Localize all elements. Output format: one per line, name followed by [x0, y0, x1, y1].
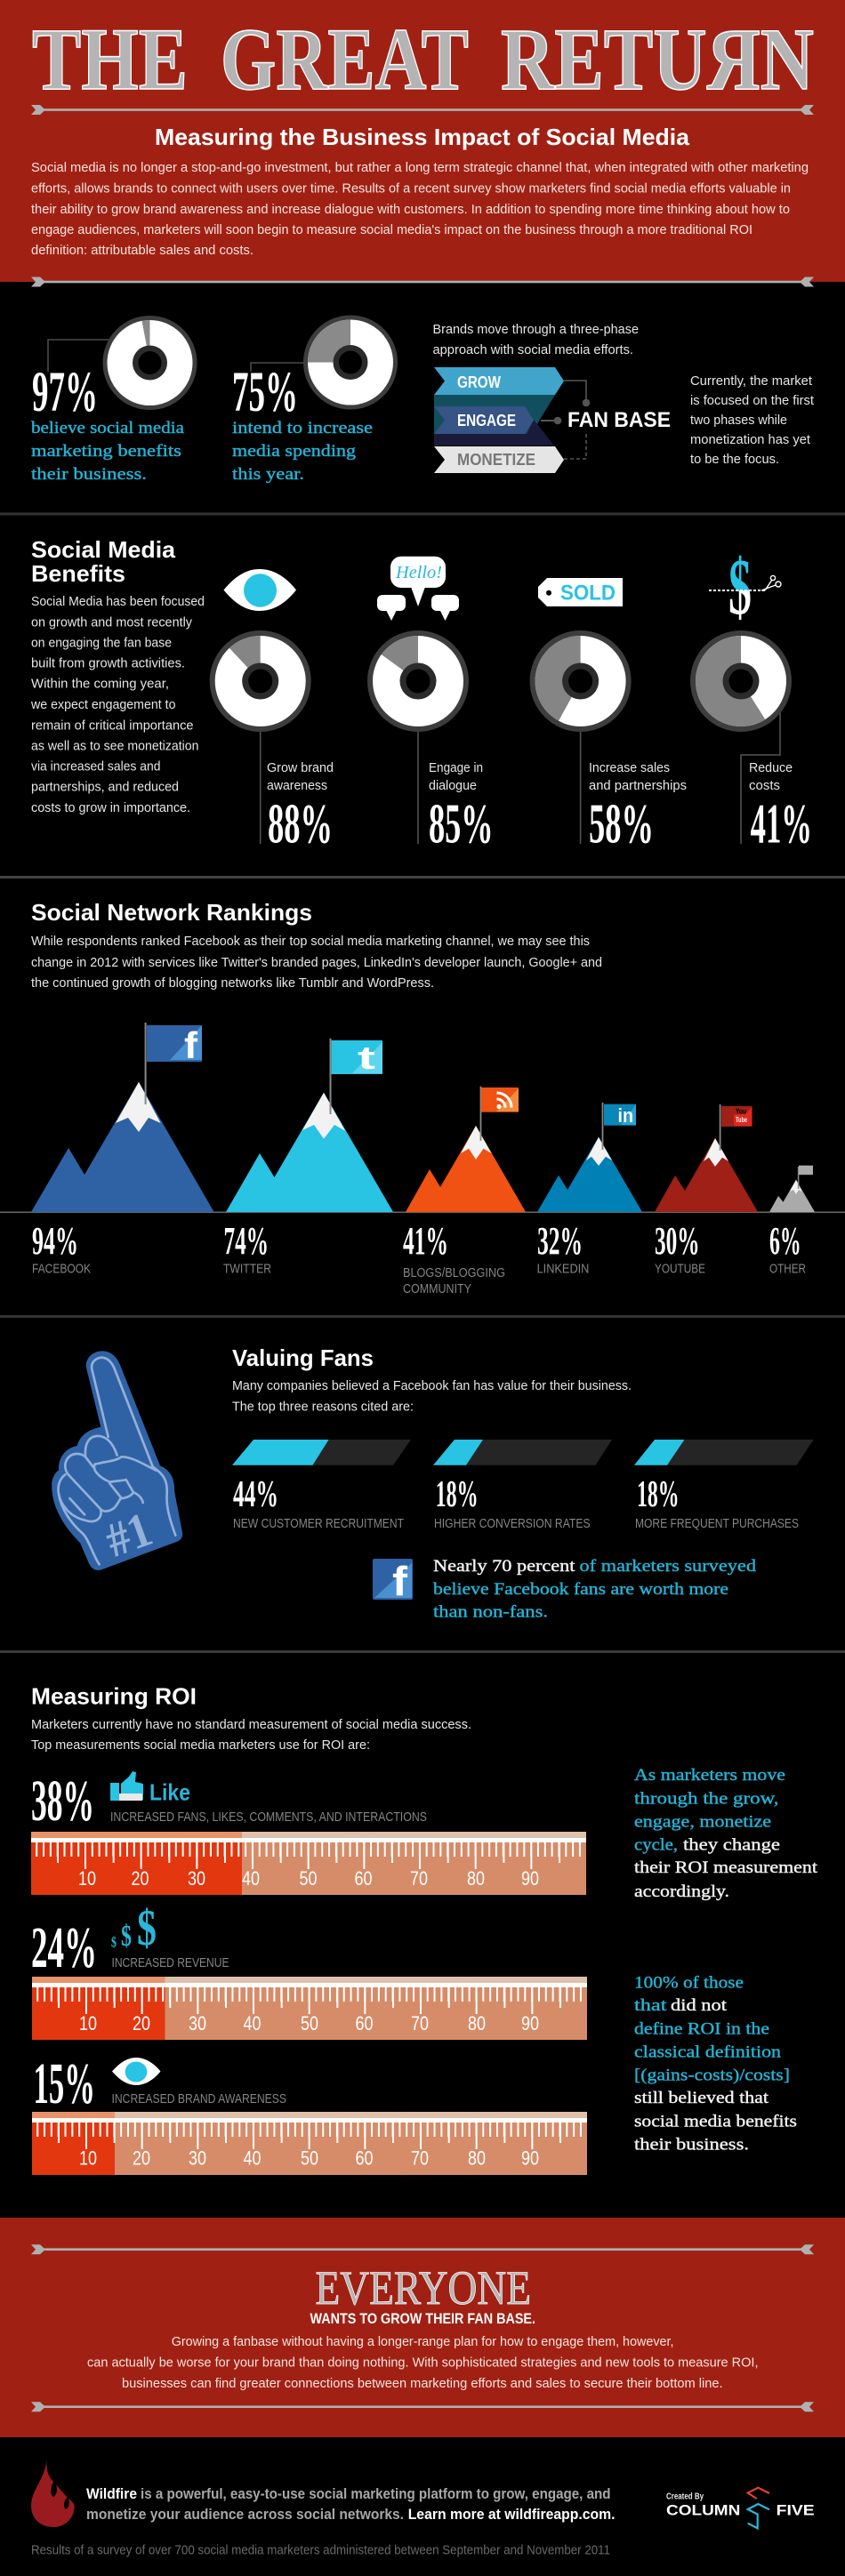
icon: dollar with scissors — [709, 543, 781, 631]
callout: classical definition: still believed that — [634, 2089, 769, 2107]
sub-headline: WANTS TO GROW THEIR FAN BASE. — [310, 2310, 535, 2327]
flag: youtube: Tube — [736, 1116, 747, 1124]
chevron: grow: GROW — [457, 373, 501, 391]
ruler 24%: 70 — [411, 2012, 429, 2034]
stat 97% caption — [31, 419, 185, 484]
reason: higher conversion rates: HIGHER CONVERSION RATES — [434, 1516, 591, 1531]
panel: conclusion — [0, 2218, 845, 2437]
panel: measuring roi — [31, 1682, 818, 2175]
callout: classical definition: classical definition — [634, 2043, 782, 2062]
callout: classical definition: [(gains-costs)/costs] — [634, 2066, 790, 2085]
ruler 38%: 10 — [78, 1867, 96, 1890]
ruler 24%: 90 — [521, 2012, 539, 2034]
benefit: grow brand awareness: 88% — [268, 792, 333, 855]
stat 97% caption: marketing benefits — [31, 442, 181, 461]
stat 38%: Like — [149, 1778, 190, 1805]
reason: higher conversion rates: 18% — [436, 1474, 479, 1515]
fan base label: FAN BASE — [567, 408, 671, 432]
arrow divider bottom — [31, 2402, 814, 2411]
intro text: engage audiences, marketers will soon begin to measure social media's impact on the business through a more traditional ROI — [31, 222, 752, 237]
heading: Social Media — [31, 536, 176, 563]
ruler 38%: 60 — [354, 1867, 372, 1890]
body text: Top measurements social media marketers use for ROI are: — [31, 1737, 370, 1753]
body text: Marketers currently have no standard measurement of social media success. — [31, 1717, 471, 1732]
benefit: engage in dialogue: 85% — [429, 792, 494, 855]
flag: twitter — [332, 1039, 382, 1076]
icon: foam finger: #1 — [99, 1502, 158, 1568]
panel: social network rankings — [0, 899, 845, 1296]
intro text: definition: attributable sales and costs. — [31, 243, 254, 258]
callout: measurement cycle — [634, 1766, 818, 1901]
flag: facebook: f — [184, 1024, 198, 1066]
callout: measurement cycle: cycle, — [634, 1836, 678, 1855]
callout: facebook fans value: believe Facebook fans are worth more — [433, 1580, 728, 1599]
body text: While respondents ranked Facebook as their top social media marketing channel, we may see this — [31, 934, 590, 949]
mountain: youtube — [655, 1104, 758, 1212]
body text: Social Media has been focused — [31, 594, 205, 609]
rank: youtube: 30% — [655, 1219, 700, 1263]
rank: other — [769, 1219, 806, 1277]
body text: Within the coming year, — [31, 677, 169, 692]
heading — [31, 536, 176, 587]
ruler 15%: 30 — [189, 2147, 206, 2170]
body text: remain of critical importance — [31, 718, 194, 733]
ruler 24%: 80 — [468, 2012, 486, 2034]
conclusion text — [87, 2334, 758, 2391]
stat 24%: INCREASED REVENUE — [112, 1955, 229, 1970]
intro text: Social media is no longer a stop-and-go investment, but rather a long term strategic channel that, when integrated with other marketing — [31, 160, 809, 175]
donut 41% — [690, 630, 792, 844]
body text — [31, 1717, 471, 1753]
donut 85% — [367, 630, 469, 844]
icon: sold tag: SOLD — [560, 582, 616, 605]
body text: built from growth activities. — [31, 656, 185, 671]
benefit: increase sales and partnerships — [589, 760, 687, 855]
conclusion text: Growing a fanbase without having a longer-range plan for how to engage them, however, — [172, 2334, 673, 2349]
chevron: monetize — [434, 446, 564, 473]
benefit: grow brand awareness: awareness — [267, 778, 327, 793]
intro text: efforts, allows brands to connect with users over time. Results of a recent survey show marketers find social media efforts valuable in — [31, 181, 791, 196]
heading: Measuring ROI — [31, 1682, 197, 1709]
body text: we expect engagement to — [30, 697, 176, 712]
benefit: reduce costs: costs — [749, 778, 780, 793]
reason: new customer recruitment: NEW CUSTOMER RECRUITMENT — [233, 1516, 404, 1531]
body text — [232, 1378, 632, 1415]
chevron: engage — [434, 406, 534, 434]
rank: youtube: YOUTUBE — [655, 1262, 705, 1277]
reason: more frequent purchases — [634, 1440, 814, 1531]
headline: EVERYONE — [315, 2261, 531, 2315]
icon: speech bubbles — [377, 557, 459, 621]
market focus note: Currently, the market — [690, 373, 813, 389]
body text: partnerships, and reduced — [31, 780, 179, 795]
mountain: facebook — [31, 1023, 214, 1212]
reason: new customer recruitment: 44% — [233, 1474, 278, 1515]
chevron: engage: ENGAGE — [457, 412, 516, 429]
three-phase intro: Brands move through a three-phase — [432, 322, 639, 337]
flag: rss — [481, 1087, 519, 1112]
rank: linkedin: 32% — [537, 1219, 583, 1263]
three-phase intro: approach with social media efforts. — [432, 342, 633, 357]
conclusion text: businesses can find greater connections between marketing efforts and sales to secure their bottom line. — [122, 2376, 723, 2391]
title — [32, 10, 814, 108]
mountain: other — [769, 1166, 815, 1212]
title: GREAT — [221, 10, 469, 108]
icon: dollars: $ — [121, 1920, 132, 1953]
panel: social media benefits — [30, 536, 812, 855]
icon: dollar with scissors: $ — [728, 543, 752, 631]
flag: youtube — [721, 1106, 752, 1127]
market focus note: to be the focus. — [690, 452, 779, 467]
mountain: blogs — [406, 1087, 526, 1212]
callout: classical definition — [634, 1974, 797, 2154]
donut 75% — [251, 315, 398, 409]
wildfire description: is a powerful, easy-to-use social marketing platform to grow, engage, and — [141, 2485, 610, 2502]
icon: sold tag — [538, 578, 623, 606]
arrow divider top — [31, 2244, 814, 2254]
stat 75% caption: media spending — [232, 442, 357, 461]
callout: measurement cycle: their ROI measurement — [634, 1858, 818, 1877]
callout: classical definition: that — [634, 1996, 667, 2015]
ruler 15%: 60 — [356, 2147, 374, 2170]
subtitle: Measuring the Business Impact of Social Media — [155, 124, 690, 150]
benefit: increase sales and partnerships: 58% — [589, 792, 654, 855]
flag: youtube: You — [736, 1108, 746, 1115]
benefit: engage in dialogue: dialogue — [429, 778, 477, 793]
panel: key stats — [31, 315, 815, 484]
rank: youtube — [655, 1219, 705, 1277]
ruler 15%: 50 — [301, 2147, 318, 2170]
callout: facebook fans value: Nearly 70 percent — [433, 1557, 575, 1576]
rank: blogs — [403, 1219, 505, 1296]
wildfire description: Learn more at wildfireapp.com. — [408, 2506, 616, 2523]
ruler 24%: 30 — [189, 2012, 206, 2034]
ruler 15%: 40 — [244, 2147, 262, 2170]
body text — [31, 934, 602, 991]
donut 97% — [48, 316, 197, 410]
chevron: grow — [434, 367, 564, 395]
rank: other: 6% — [769, 1219, 801, 1263]
stat 75% caption: this year. — [232, 465, 304, 484]
callout: facebook fans value: than non-fans. — [433, 1603, 548, 1622]
mountain: twitter — [226, 1039, 393, 1212]
ruler 38%: 80 — [467, 1867, 485, 1890]
callout: measurement cycle: engage, monetize — [634, 1812, 771, 1832]
intro text: their ability to grow brand awareness and increase dialogue with customers. In addition to spending more time thinking about how to — [31, 202, 790, 217]
chevron: monetize: MONETIZE — [457, 451, 535, 469]
stat 75% caption — [232, 419, 373, 484]
ruler 38%: 30 — [188, 1867, 205, 1890]
stat 15% — [34, 2051, 286, 2116]
donut 58% — [530, 630, 632, 844]
ruler 38% — [31, 1832, 586, 1895]
icon: dollars: $ — [137, 1900, 157, 1956]
stat 38%: INCREASED FANS, LIKES, COMMENTS, AND INTERACTIONS — [110, 1810, 427, 1825]
mountain: linkedin — [537, 1103, 642, 1212]
stat 97% caption: their business. — [31, 465, 147, 484]
callout: measurement cycle: they change — [683, 1836, 780, 1855]
conclusion text: can actually be worse for your brand than doing nothing. With sophisticated strategies and new tools to measure ROI, — [87, 2355, 758, 2371]
phase diagram — [434, 367, 671, 473]
ruler 24% — [32, 1977, 587, 2040]
heading: Valuing Fans — [232, 1344, 374, 1371]
ruler 24%: 10 — [79, 2012, 97, 2034]
body text: change in 2012 with services like Twitter's branded pages, LinkedIn's developer launch, Google+ and — [31, 955, 602, 970]
arrow divider bottom of header — [31, 277, 814, 286]
three-phase intro — [432, 322, 639, 357]
body text: as well as to see monetization — [31, 738, 199, 753]
ruler 24%: 50 — [301, 2012, 318, 2034]
rank: facebook — [32, 1219, 91, 1277]
market focus note: monetization has yet — [690, 432, 811, 447]
icon: foam finger — [52, 1351, 182, 1570]
rank: blogs: 41% — [403, 1219, 448, 1263]
logo: column five: FIVE — [777, 2501, 815, 2518]
body text: on engaging the fan base — [31, 636, 172, 651]
stat 15%: INCREASED BRAND AWARENESS — [112, 2091, 286, 2107]
body text: via increased sales and — [31, 759, 160, 774]
ruler 15% — [32, 2112, 587, 2175]
intro text — [31, 160, 809, 258]
callout: measurement cycle: through the grow, — [634, 1789, 779, 1809]
flag: twitter: t — [358, 1039, 375, 1076]
benefit: grow brand awareness: Grow brand — [267, 760, 334, 775]
icon: wildfire flame — [31, 2458, 75, 2527]
rank: other: OTHER — [769, 1262, 806, 1277]
benefit: grow brand awareness — [267, 760, 334, 855]
callout: classical definition: define ROI in the — [634, 2020, 769, 2038]
callout: facebook fans value — [433, 1557, 757, 1622]
ruler 38%: 20 — [132, 1867, 149, 1890]
ruler 38%: 40 — [242, 1867, 260, 1890]
title: THE — [32, 10, 188, 108]
panel: footer — [31, 2458, 815, 2558]
heading: Benefits — [31, 560, 125, 587]
rank: twitter: TWITTER — [223, 1262, 271, 1277]
icon: dollars: $ — [111, 1933, 117, 1951]
rank: facebook: 94% — [32, 1219, 78, 1263]
reason: more frequent purchases: 18% — [637, 1474, 680, 1515]
callout: classical definition: their business. — [634, 2136, 749, 2154]
market focus note — [690, 373, 815, 467]
stat 97%: 97% — [32, 360, 98, 424]
stat 38%: 38% — [31, 1769, 94, 1834]
market focus note: two phases while — [690, 413, 787, 428]
rank: linkedin — [537, 1219, 589, 1277]
rank: blogs: BLOGS/BLOGGING — [403, 1265, 505, 1280]
stat 75%: 75% — [232, 360, 298, 424]
reason: more frequent purchases: MORE FREQUENT PURCHASES — [635, 1516, 799, 1531]
ruler 15%: 70 — [411, 2147, 429, 2170]
ruler 24%: 20 — [133, 2012, 150, 2034]
icon: dollars — [111, 1900, 157, 1956]
benefit: reduce costs: Reduce — [749, 760, 793, 775]
benefit: engage in dialogue — [429, 760, 494, 855]
body text: on growth and most recently — [31, 614, 192, 630]
icon: eye — [112, 2058, 160, 2085]
reason: higher conversion rates — [433, 1440, 612, 1531]
rank: blogs: COMMUNITY — [403, 1281, 471, 1296]
rank: twitter: 74% — [224, 1219, 269, 1263]
market focus note: is focused on the first — [690, 393, 815, 408]
body text: Many companies believed a Facebook fan has value for their business. — [232, 1378, 632, 1393]
rank: linkedin: LINKEDIN — [537, 1262, 589, 1277]
callout: measurement cycle: As marketers move — [634, 1766, 785, 1785]
benefit: increase sales and partnerships: and partnerships — [589, 778, 687, 793]
callout: measurement cycle: accordingly. — [634, 1882, 729, 1901]
footnote: Results of a survey of over 700 social media marketers administered between September and November 2011 — [31, 2543, 610, 2558]
body text: costs to grow in importance. — [31, 800, 190, 815]
wildfire description — [86, 2485, 616, 2523]
ruler 24%: 40 — [244, 2012, 262, 2034]
icon: facebook — [373, 1558, 413, 1604]
stat 24% — [31, 1900, 229, 1980]
benefit: reduce costs — [749, 760, 812, 855]
icon: like thumb — [110, 1771, 143, 1801]
benefit: engage in dialogue: Engage in — [429, 760, 483, 775]
callout: classical definition: did not — [671, 1996, 728, 2015]
flag: linkedin: in — [617, 1104, 633, 1127]
ruler 15%: 20 — [133, 2147, 150, 2170]
rank: twitter — [223, 1219, 271, 1277]
ruler 38%: 70 — [410, 1867, 428, 1890]
heading: Social Network Rankings — [31, 899, 312, 926]
benefit: increase sales and partnerships: Increase sales — [589, 760, 670, 775]
panel: header — [0, 0, 845, 282]
flag: facebook — [147, 1024, 202, 1066]
stat 24%: 24% — [31, 1915, 97, 1980]
ruler 38%: 50 — [299, 1867, 317, 1890]
logo: column five: COLUMN — [666, 2501, 740, 2518]
body text: The top three reasons cited are: — [232, 1400, 414, 1415]
stat 38% — [31, 1769, 427, 1834]
stat 15%: 15% — [34, 2051, 95, 2116]
callout: facebook fans value: of marketers surveyed — [580, 1557, 757, 1576]
ruler 15%: 80 — [468, 2147, 486, 2170]
ruler 15%: 90 — [521, 2147, 539, 2170]
body text: the continued growth of blogging networks like Tumblr and WordPress. — [31, 975, 434, 991]
callout: classical definition: 100% of those — [634, 1974, 744, 1993]
arrow divider — [31, 105, 814, 115]
wildfire description: Wildfire — [86, 2485, 137, 2502]
logo: column five: Created By — [666, 2492, 704, 2502]
icon: speech bubbles: Hello! — [395, 563, 442, 582]
stat 75% caption: intend to increase — [232, 419, 373, 437]
body text — [30, 594, 205, 815]
donut 88% — [210, 630, 311, 844]
stat 97% caption: believe social media — [31, 419, 185, 437]
ruler 15%: 10 — [79, 2147, 97, 2170]
flag: other — [799, 1166, 813, 1175]
logo: column five — [666, 2488, 815, 2528]
icon: facebook: f — [392, 1558, 408, 1604]
panel: valuing fans — [52, 1344, 814, 1622]
callout: classical definition: social media benefits — [634, 2113, 797, 2131]
ruler 24%: 60 — [356, 2012, 374, 2034]
connectors — [541, 381, 589, 459]
wildfire description: monetize your audience across social networks. — [86, 2506, 404, 2523]
icon: eye — [224, 569, 296, 611]
ruler 38%: 90 — [521, 1867, 539, 1890]
reason: new customer recruitment — [232, 1440, 411, 1531]
rank: facebook: FACEBOOK — [32, 1262, 91, 1277]
